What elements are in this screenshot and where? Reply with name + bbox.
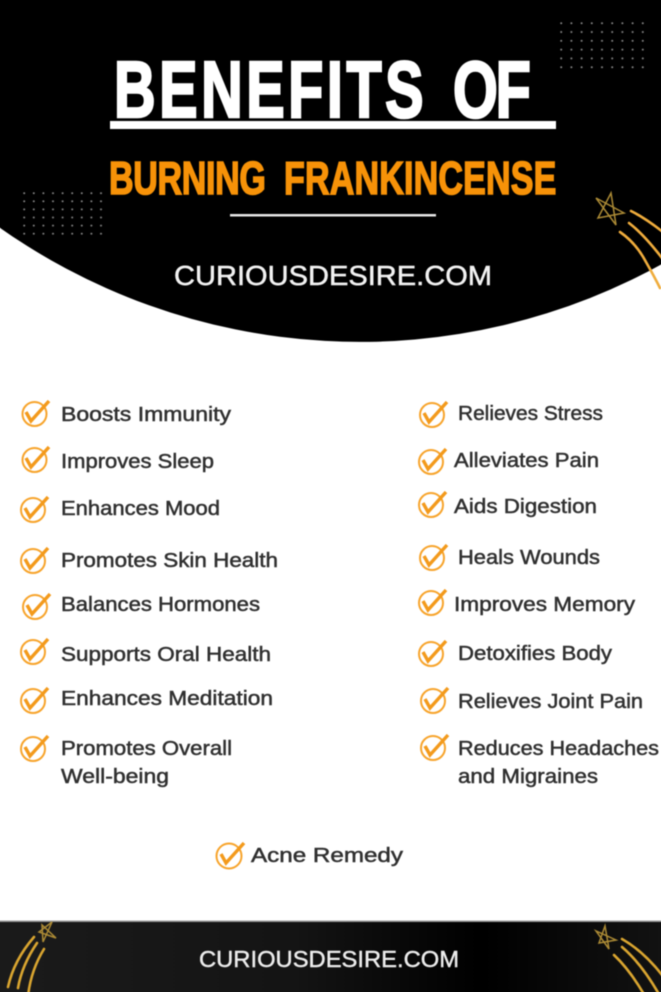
item: relieves joint pain: Relieves Joint Pain — [458, 690, 643, 713]
item: alleviates pain: Alleviates Pain — [454, 449, 599, 472]
decorative dot grid left — [23, 192, 103, 235]
item: improves memory — [419, 590, 636, 616]
item: balances hormones: Balances Hormones — [61, 593, 260, 616]
item: enhances mood: Enhances Mood — [61, 497, 220, 520]
item: reduces headaches and migraines — [421, 735, 659, 788]
item: improves sleep — [22, 447, 214, 473]
subtitle: burning frankincense: FRANKINCENSE — [284, 152, 556, 204]
item: enhances meditation — [21, 687, 273, 713]
footer website label: CURIOUSDESIRE.COM — [199, 946, 459, 972]
benefits list: right column — [419, 402, 659, 788]
item: relieves stress: Relieves Stress — [458, 402, 603, 425]
title: benefits of: BENEFITS — [114, 45, 424, 134]
footer band — [0, 920, 661, 992]
subtitle: burning frankincense — [109, 152, 556, 204]
website label: CURIOUSDESIRE.COM — [174, 260, 492, 291]
icon: shooting star top right — [596, 193, 661, 288]
item: aids digestion — [419, 492, 597, 518]
header: black curved panel — [0, 0, 661, 342]
item: detoxifies body: Detoxifies Body — [458, 642, 613, 665]
item: reduces headaches and migraines: and Migraines — [458, 765, 598, 788]
item: promotes skin health: Promotes Skin Health — [61, 549, 278, 572]
item: supports oral health — [21, 639, 271, 666]
icon: shooting star footer right — [596, 926, 661, 992]
item: promotes overall well-being: Promotes Overall — [61, 737, 232, 760]
item: boosts immunity — [22, 401, 232, 426]
title: benefits of: OF — [453, 45, 531, 134]
item: acne remedy: Acne Remedy — [251, 844, 404, 867]
decorative dot grid top right — [560, 22, 645, 69]
item: boosts immunity: Boosts Immunity — [61, 403, 232, 426]
benefits list: left column — [21, 401, 278, 788]
item: promotes overall well-being: Well-being — [61, 765, 169, 788]
item: improves sleep: Improves Sleep — [61, 450, 214, 473]
item: promotes overall well-being — [21, 736, 232, 788]
item: heals wounds — [420, 545, 600, 570]
item: aids digestion: Aids Digestion — [454, 495, 597, 518]
icon: shooting star footer left — [8, 922, 56, 992]
item: balances hormones — [23, 593, 260, 619]
item: alleviates pain — [419, 449, 599, 474]
short divider line — [230, 214, 436, 216]
item: enhances meditation: Enhances Meditation — [61, 687, 273, 710]
item: acne remedy — [216, 843, 404, 868]
subtitle: burning frankincense: BURNING — [109, 152, 266, 204]
title underline — [110, 121, 556, 129]
item: heals wounds: Heals Wounds — [458, 546, 600, 569]
item: improves memory: Improves Memory — [454, 593, 636, 616]
item: supports oral health: Supports Oral Health — [61, 643, 271, 666]
item: reduces headaches and migraines: Reduces Headaches — [458, 737, 659, 760]
item: enhances mood — [21, 497, 220, 522]
item: detoxifies body — [419, 641, 613, 666]
